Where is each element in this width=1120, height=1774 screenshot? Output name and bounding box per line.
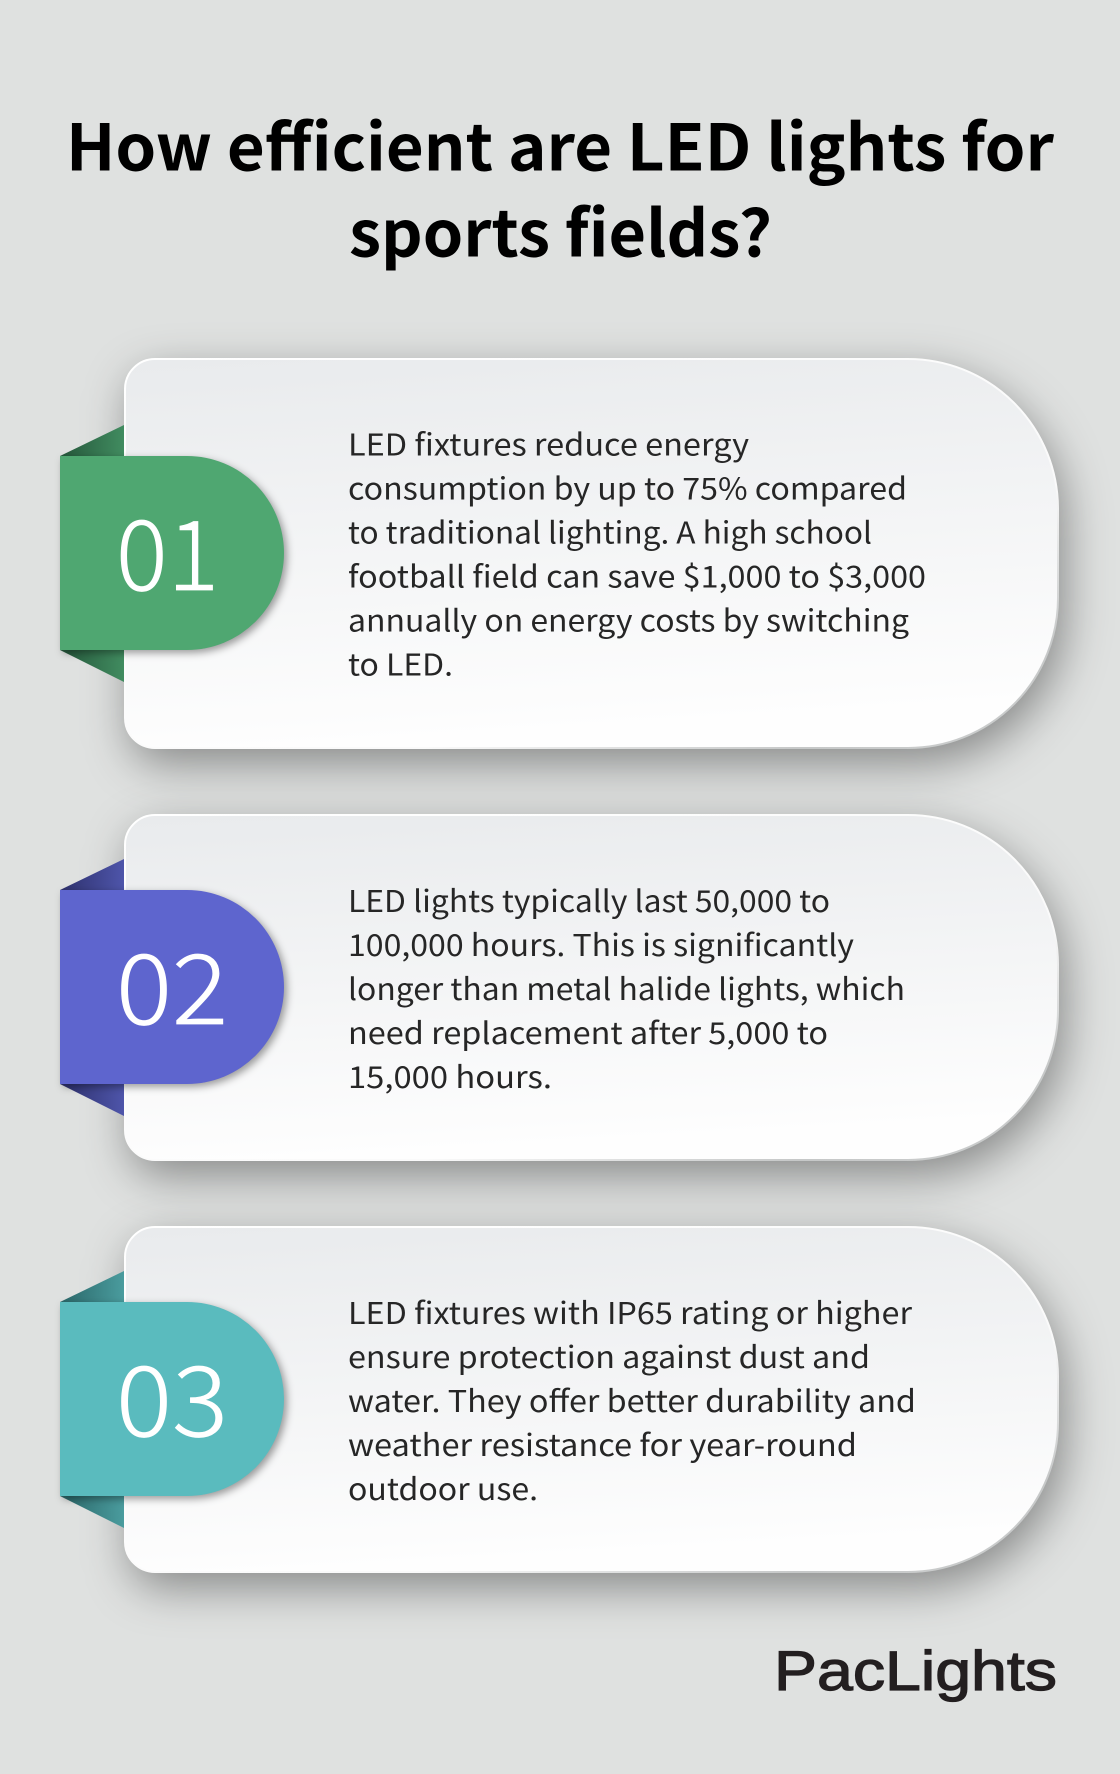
number tab shadow <box>63 459 287 653</box>
text block: energy savings: football field can save $1,000 to $3,000 <box>348 552 926 596</box>
text block: durability: ensure protection against dust and <box>348 1333 870 1377</box>
number 02: 02 <box>116 911 228 1052</box>
text block: energy savings: annually on energy costs by switching <box>348 596 909 640</box>
logo: PacLights: PacLights <box>774 1639 1057 1702</box>
text block: energy savings: consumption by up to 75% compared <box>348 464 907 508</box>
ribbon fold: bottom <box>60 650 124 682</box>
text block: energy savings: to LED. <box>348 640 453 684</box>
number tab <box>60 456 284 650</box>
text block: lifespan <box>348 877 905 1097</box>
ribbon fold: top <box>60 859 124 890</box>
text block: durability: outdoor use. <box>348 1465 538 1509</box>
text block: lifespan: LED lights typically last 50,000 to <box>348 877 830 921</box>
title: How efficient are LED lights for <box>66 98 1054 190</box>
title: sports fields? <box>349 184 772 276</box>
number 01: 01 <box>116 477 219 618</box>
ribbon fold: bottom <box>60 1496 124 1528</box>
text block: lifespan: longer than metal halide lights, which <box>348 965 905 1009</box>
text block: energy savings: LED fixtures reduce energy <box>348 420 749 464</box>
number tab <box>60 1302 284 1496</box>
text block: durability: weather resistance for year-round <box>348 1421 857 1465</box>
number tab shadow <box>63 893 287 1087</box>
text block: lifespan: need replacement after 5,000 to <box>348 1009 828 1053</box>
text block: durability <box>348 1289 916 1509</box>
text block: lifespan: 100,000 hours. This is significantly <box>348 921 854 965</box>
ribbon fold: top <box>60 1271 124 1302</box>
text block: lifespan: 15,000 hours. <box>348 1053 552 1097</box>
panel: card 3 <box>60 1227 1064 1587</box>
panel: card 1 <box>60 359 1064 763</box>
number 03: 03 <box>116 1323 228 1464</box>
text block: energy savings: to traditional lighting. A high school <box>348 508 872 552</box>
text block: energy savings <box>348 420 926 684</box>
text block: durability: water. They offer better durability and <box>348 1377 916 1421</box>
title <box>66 98 1054 276</box>
ribbon fold: bottom <box>60 1084 124 1116</box>
number tab <box>60 890 284 1084</box>
number tab shadow <box>63 1305 287 1499</box>
panel: card 2 <box>60 815 1064 1175</box>
text block: durability: LED fixtures with IP65 rating or higher <box>348 1289 912 1333</box>
ribbon fold: top <box>60 425 124 456</box>
